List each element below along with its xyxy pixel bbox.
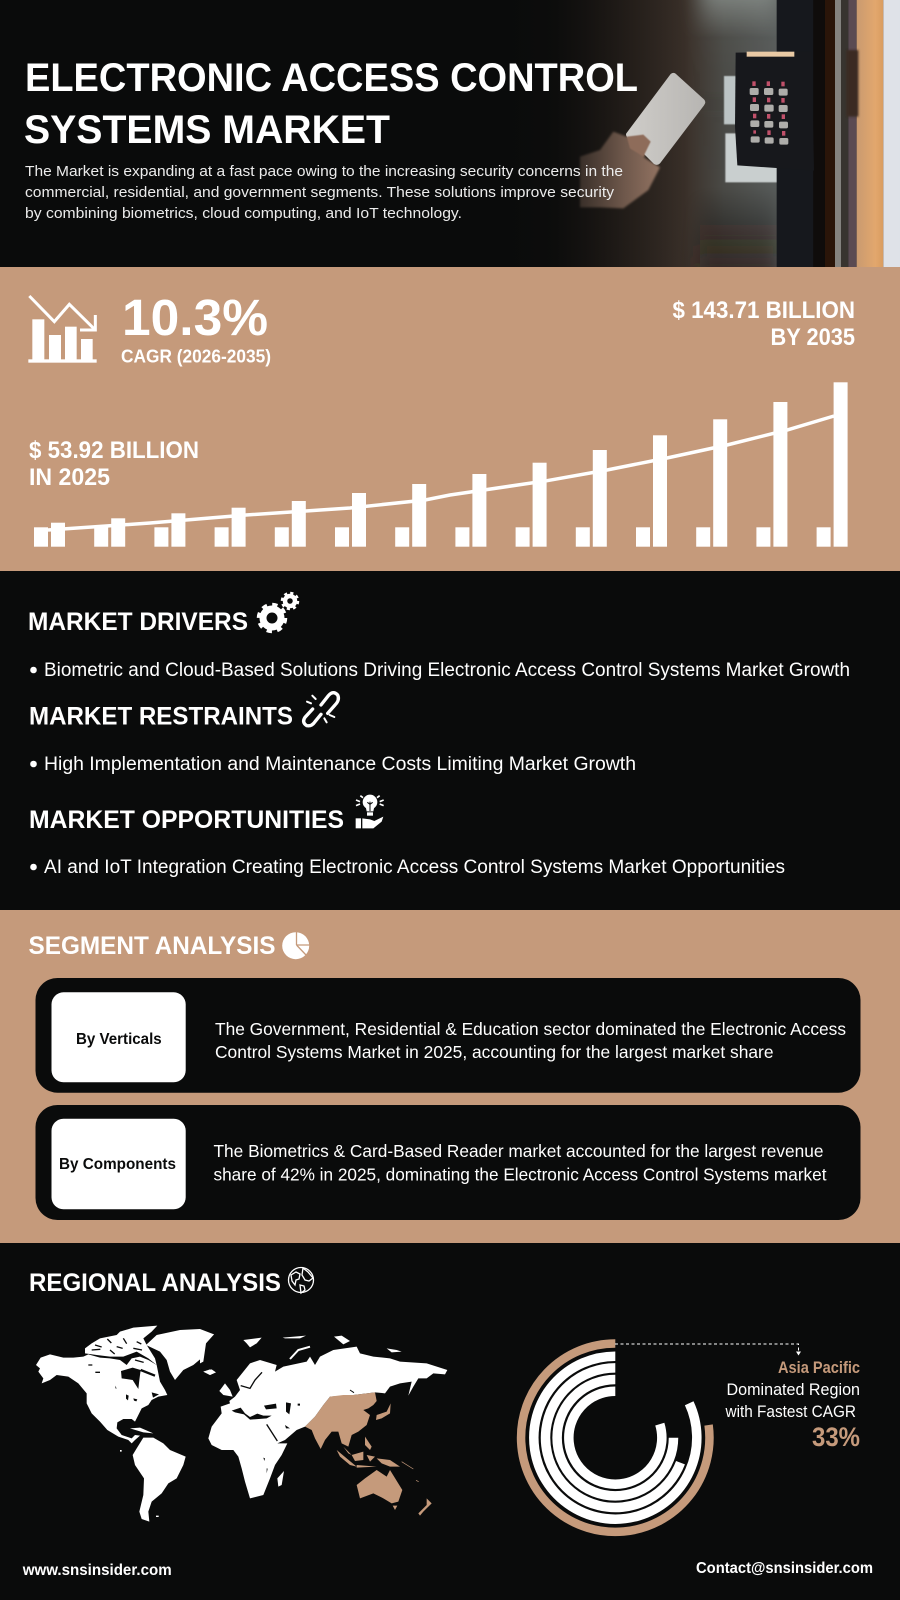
label box: by components: By Components: [59, 1156, 176, 1173]
value 2025: IN 2025: [29, 464, 110, 491]
callout: Asia Pacific: with Fastest CAGR: [725, 1403, 856, 1421]
callout: Asia Pacific: Asia Pacific: [778, 1359, 860, 1377]
value 2025: [29, 437, 199, 491]
intro paragraph: The Market is expanding at a fast pace owing to the increasing security concerns in the: [25, 163, 623, 180]
callout: Asia Pacific: [725, 1359, 860, 1452]
panel: hero header: [0, 0, 900, 267]
text: driver bullet: Biometric and Cloud-Based Solutions Driving Electronic Access Control Systems Market Growth: [44, 660, 850, 681]
footer: website: www.snsinsider.com: [22, 1562, 172, 1579]
icon: broken chain link: [304, 693, 338, 726]
icon: gears: [258, 593, 298, 632]
text: verticals description: [215, 1019, 846, 1062]
text: components description: share of 42% in 2025, dominating the Electronic Access Control Systems market: [214, 1164, 827, 1184]
text: restraint bullet: High Implementation and Maintenance Costs Limiting Market Growth: [44, 754, 636, 775]
icon: lightbulb over hand: [356, 795, 384, 828]
card: by components: [36, 1105, 860, 1220]
footer: contact: Contact@snsinsider.com: [696, 1560, 873, 1577]
intro paragraph: commercial, residential, and government segments. These solutions improve security: [25, 184, 615, 201]
bar chart with growth line: [34, 382, 848, 547]
radial chart: [521, 1344, 709, 1532]
label box: by components: [52, 1119, 186, 1209]
value 2025: $ 53.92 BILLION: [29, 437, 199, 464]
callout: Asia Pacific: Dominated Region: [726, 1381, 860, 1399]
text: verticals description: Control Systems Market in 2025, accounting for the largest market share: [215, 1042, 774, 1062]
heading: regional analysis: REGIONAL ANALYSIS: [29, 1269, 281, 1297]
hero photo: keypad, card and hand: [500, 0, 900, 267]
map: Americas and Greenland: [36, 1326, 216, 1522]
text: verticals description: The Government, Residential & Education sector dominated the Electronic Access: [215, 1019, 846, 1039]
text: components description: [214, 1141, 827, 1184]
intro paragraph: by combining biometrics, cloud computing, and IoT technology.: [25, 205, 462, 222]
title: ELECTRONIC ACCESS CONTROL: [25, 56, 638, 100]
panel: regional analysis: [0, 1243, 900, 1600]
panel: drivers, restraints, opportunities: [0, 571, 900, 910]
value 2035: BY 2035: [770, 324, 855, 351]
heading: segment analysis: SEGMENT ANALYSIS: [28, 932, 276, 960]
value 2035: $ 143.71 BILLION: [672, 297, 855, 324]
CAGR figure: 10.3%: [122, 289, 268, 346]
value 2035: [672, 297, 855, 351]
icon: globe: [288, 1268, 314, 1293]
text: components description: The Biometrics & Card-Based Reader market accounted for the largest revenue: [214, 1141, 824, 1161]
icon: pie chart: [282, 932, 310, 959]
dashed leader arrow: [615, 1344, 801, 1356]
callout: Asia Pacific: 33%: [812, 1422, 860, 1452]
world map: [36, 1326, 447, 1522]
map: Eurasia, Africa: [200, 1331, 447, 1516]
title: [24, 56, 638, 152]
text: opportunity bullet: AI and IoT Integration Creating Electronic Access Control Systems Market Opportunities: [44, 857, 785, 878]
label box: by verticals: By Verticals: [76, 1031, 162, 1048]
panel: segment analysis: [0, 910, 900, 1243]
card: by verticals: [36, 978, 860, 1093]
title: SYSTEMS MARKET: [24, 108, 390, 152]
icon: chart with trend arrow: [28, 296, 97, 363]
label box: by verticals: [52, 992, 186, 1082]
intro paragraph: [25, 163, 623, 222]
panel: market growth: [0, 267, 900, 571]
heading: market restraints: MARKET RESTRAINTS: [29, 702, 293, 730]
heading: market drivers: MARKET DRIVERS: [28, 608, 248, 636]
heading: market opportunities: MARKET OPPORTUNITIES: [29, 806, 344, 834]
CAGR figure: CAGR (2026-2035): [121, 346, 271, 366]
